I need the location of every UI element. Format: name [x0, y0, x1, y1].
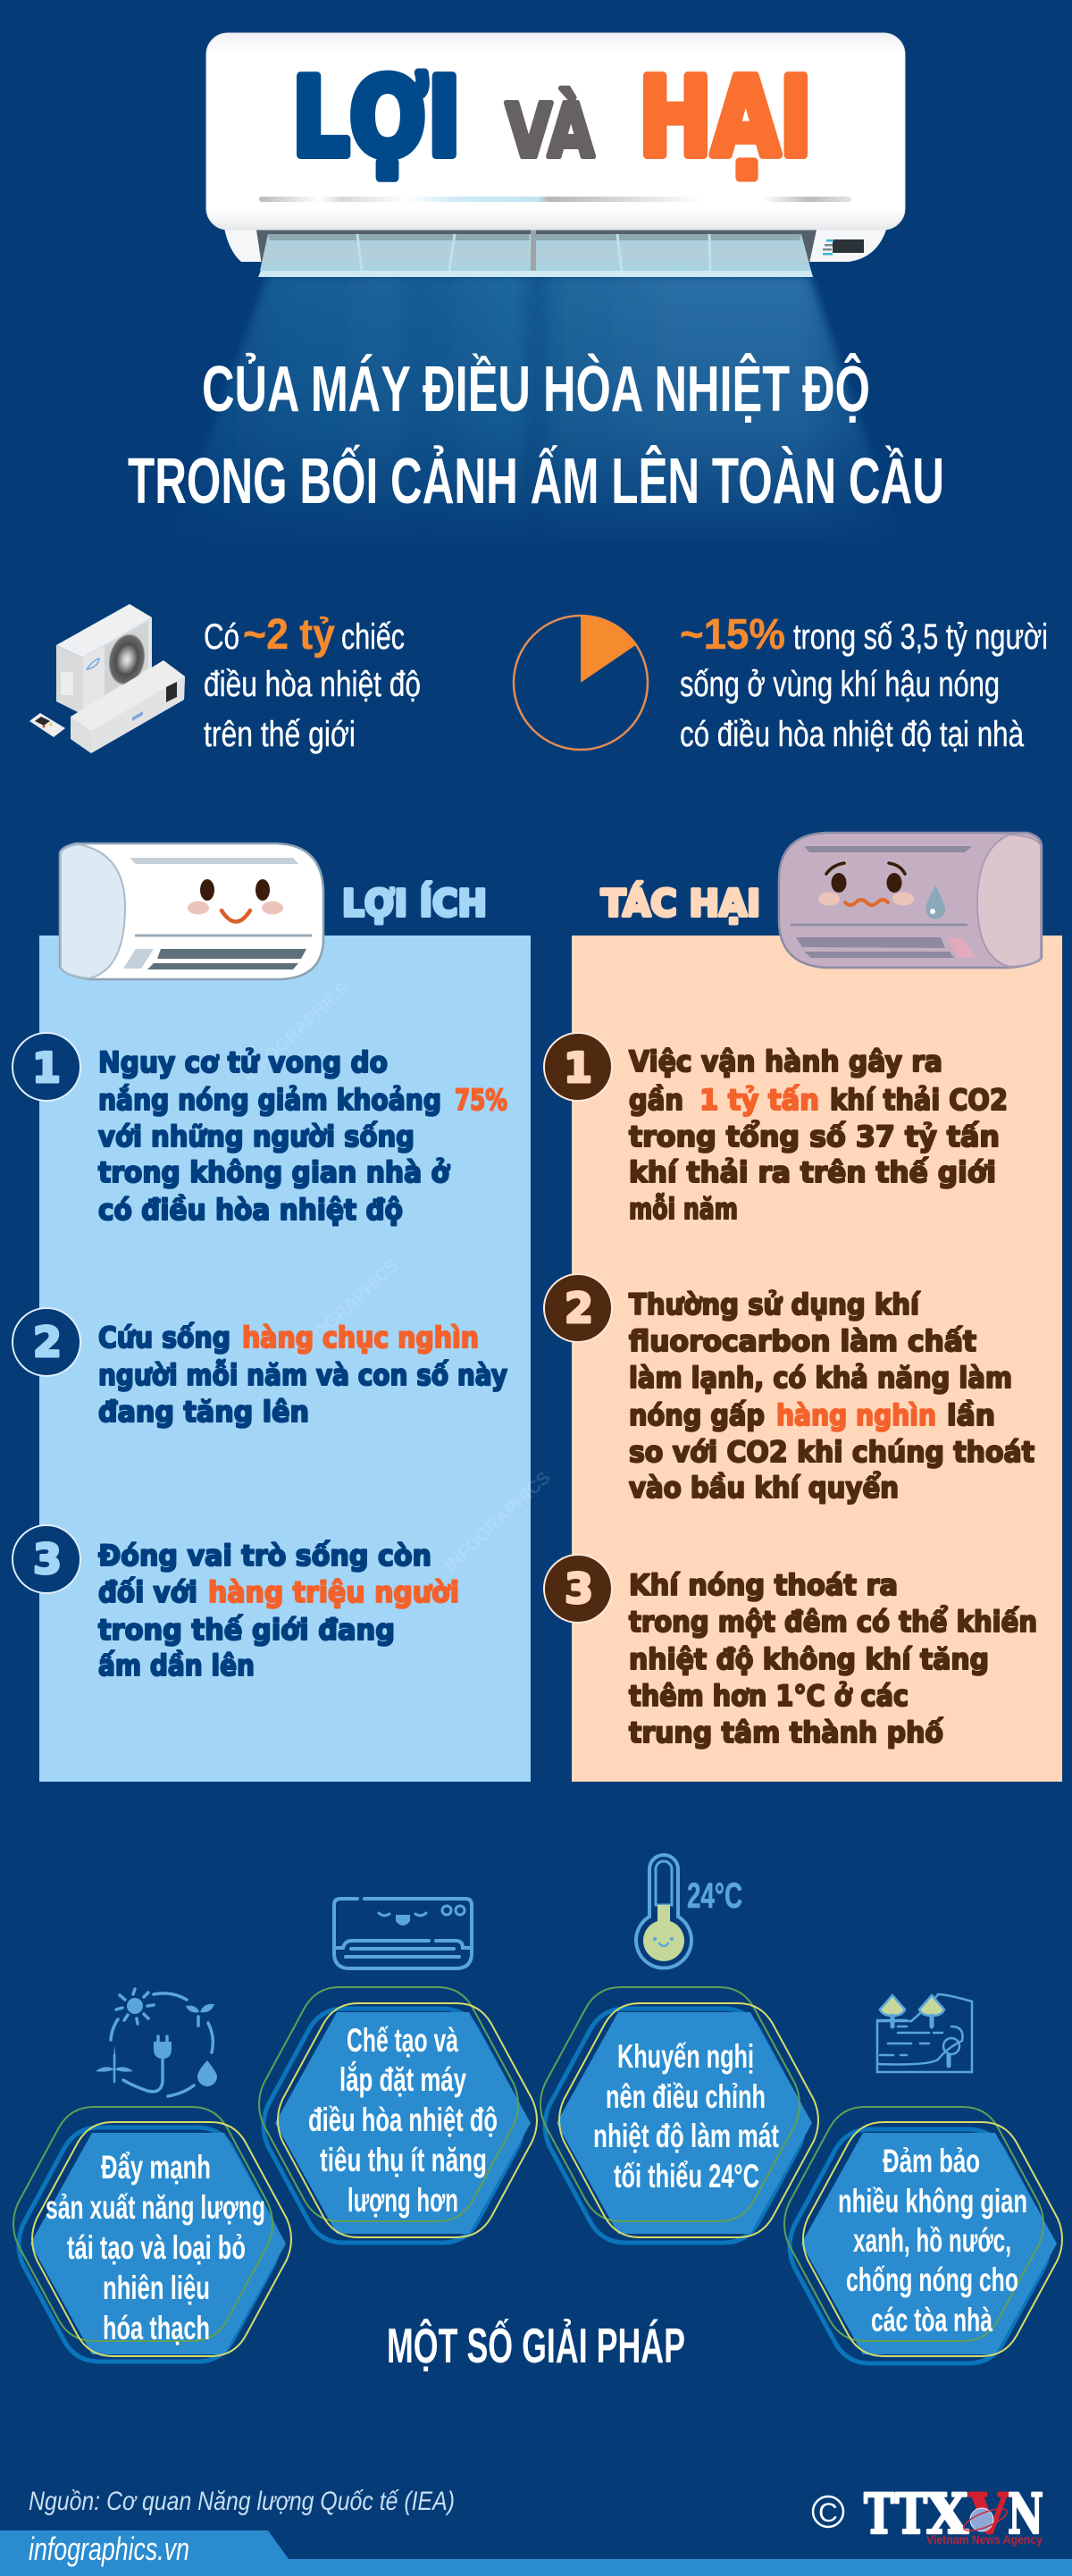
solution 2 text: [308, 2022, 498, 2219]
number badge 2: 2: [565, 1284, 593, 1332]
harm 2: làm lạnh, có khả năng làm: [629, 1361, 1012, 1395]
AC front body: [206, 33, 905, 230]
number badge 1: [544, 1033, 612, 1101]
number badge 2: 2: [33, 1318, 62, 1366]
harm 2: hàng nghìn: [776, 1398, 936, 1432]
agency name: Vietnam News Agency: [926, 2532, 1043, 2547]
logo: TTXVN copyright: [813, 2481, 1043, 2547]
solution 1 hexagon: [13, 2107, 291, 2362]
wordmark: N: [1008, 2481, 1043, 2547]
solution 3 hexagon: [540, 1987, 818, 2243]
heading: TÁC HẠI: TÁC HẠI: [601, 882, 760, 925]
solution 1 text: tái tạo và loại bỏ: [67, 2229, 246, 2266]
harm 3: thêm hơn 1°C ở các: [629, 1679, 909, 1713]
panel background: [572, 936, 1062, 1782]
benefit 1: nắng nóng giảm khoảng: [98, 1083, 441, 1117]
heading: solutions: MỘT SỐ GIẢI PHÁP: [387, 2318, 685, 2373]
solution 2 text: Chế tạo và: [347, 2022, 458, 2059]
harm 1: khí thải ra trên thế giới: [629, 1155, 996, 1189]
solution 2 text: tiêu thụ ít năng: [320, 2142, 487, 2178]
title: LỢI: LỢI: [292, 56, 461, 180]
number badge 3: [13, 1525, 80, 1593]
title: HẠI: HẠI: [639, 56, 812, 180]
benefit 3: ấm dần lên: [98, 1649, 255, 1682]
number badge 2: [13, 1308, 80, 1376]
harm 3: trung tâm thành phố: [629, 1716, 943, 1749]
benefit 1: với những người sống: [98, 1120, 415, 1154]
benefit 1: trong không gian nhà ở: [98, 1155, 450, 1189]
watermarks on benefits panel: INFOGRAPHICS: [289, 1255, 403, 1364]
number badge 1: 1: [32, 1044, 61, 1092]
solution 4 text: Đảm bảo: [883, 2143, 980, 2179]
solution 3 text: tối thiểu 24°C: [614, 2158, 759, 2194]
wordmark: [864, 2481, 1043, 2547]
harm 2: vào bầu khí quyển: [629, 1471, 899, 1505]
AC lower casing: [223, 223, 888, 262]
AC indicator stripe: [259, 197, 851, 202]
number badge 1: [13, 1033, 80, 1101]
footer bar with site name: [0, 2530, 1072, 2576]
benefit 3: hàng triệu người: [208, 1575, 459, 1609]
panel: benefits: [13, 843, 555, 1782]
solution 4 hexagon: [784, 2107, 1062, 2363]
source note: Nguồn: Cơ quan Năng lượng Quốc tế (IEA): [29, 2487, 455, 2516]
icon: air conditioner outline: [334, 1899, 472, 1968]
number badge 2: [544, 1274, 612, 1342]
wordmark: T: [864, 2481, 894, 2547]
stat: 15% of 3.5 billion: [680, 611, 1048, 754]
solution 1 text: Đẩy mạnh: [101, 2149, 211, 2186]
stat: 2 billion units: chiếc: [341, 617, 405, 657]
panel: harms: [544, 833, 1062, 1782]
outdoor unit: [56, 604, 152, 715]
watermarks on benefits panel: INFOGRAPHICS: [440, 1468, 555, 1576]
number badge 3: 3: [33, 1535, 62, 1583]
watermarks on benefits panel: [239, 978, 555, 1576]
pie chart: 15%: [514, 616, 648, 750]
benefit 3: trong thế giới đang: [98, 1613, 395, 1647]
solution 3 text: [593, 2038, 779, 2194]
benefit 1: Nguy cơ tử vong do: [98, 1045, 388, 1079]
wordmark: X: [926, 2481, 969, 2547]
benefit 1: [13, 1033, 507, 1227]
mascot: happy air conditioner: [60, 843, 323, 979]
harm 3: nhiệt độ không khí tăng: [629, 1642, 989, 1676]
solution 1 text: nhiên liệu: [103, 2270, 210, 2306]
number badge 1: 1: [564, 1044, 592, 1092]
stat: 2 billion units: [204, 611, 421, 754]
benefit 3: Đóng vai trò sống còn: [98, 1539, 431, 1573]
stat: 2 billion units: Có: [204, 617, 239, 657]
cold air beams: [205, 277, 875, 520]
harm 1: mỗi năm: [629, 1192, 738, 1226]
heading: LỢI ÍCH: LỢI ÍCH: [342, 882, 487, 925]
benefit 2: Cứu sống: [98, 1321, 230, 1355]
benefit 1: 75%: [455, 1083, 507, 1117]
harm 1: khí thải CO2: [830, 1083, 1008, 1117]
benefit 2: hàng chục nghìn: [242, 1321, 479, 1355]
title: VÀ: VÀ: [506, 88, 594, 174]
solution 4 text: các tòa nhà: [871, 2302, 992, 2338]
harm 2: fluorocarbon làm chất: [629, 1324, 976, 1358]
stat: 2 billion units: ~2 tỷ: [243, 611, 335, 659]
solution 1 text: hóa thạch: [103, 2310, 210, 2346]
harm 1: Việc vận hành gây ra: [629, 1045, 942, 1078]
indoor unit: [71, 660, 185, 753]
solution 3 text: Khuyến nghị: [617, 2038, 754, 2075]
copyright mark: C: [818, 2498, 838, 2528]
harm 3: Khí nóng thoát ra: [629, 1568, 898, 1602]
harm 2: Thường sử dụng khí: [629, 1288, 921, 1322]
watermarks on benefits panel: INFOGRAPHICS: [239, 978, 354, 1087]
icon: isometric air conditioners and remote: [29, 604, 185, 753]
harm 1: [544, 1033, 1008, 1226]
benefit 2: [13, 1308, 507, 1429]
harm 2: nóng gấp: [629, 1398, 765, 1432]
AC display: [823, 239, 864, 256]
stat: 15% of 3.5 billion: ~15%: [680, 611, 785, 659]
benefit 2: đang tăng lên: [98, 1395, 309, 1429]
AC louver: [258, 230, 813, 277]
stat: 2 billion units: điều hòa nhiệt độ: [204, 665, 421, 704]
harm 1: gần: [629, 1083, 683, 1117]
stat: 2 billion units: trên thế giới: [204, 715, 356, 754]
harm 1: trong tổng số 37 tỷ tấn: [629, 1120, 1000, 1154]
harm 1: 1 tỷ tấn: [699, 1083, 819, 1117]
site name: infographics.vn: [29, 2530, 189, 2567]
benefit 2: người mỗi năm và con số này: [98, 1358, 507, 1392]
copyright mark: [813, 2496, 843, 2528]
panel background: [39, 936, 531, 1782]
solution 3 text: nên điều chỉnh: [606, 2078, 766, 2115]
harm 3: [544, 1555, 1037, 1749]
solution 2 hexagon: [259, 1987, 537, 2243]
AC outlet slot: [256, 230, 817, 272]
solution 2 text: điều hòa nhiệt độ: [308, 2102, 498, 2138]
remote: [29, 713, 65, 737]
solution 1 text: [46, 2149, 265, 2346]
number badge 3: 3: [565, 1565, 593, 1613]
harm 2: [544, 1274, 1034, 1505]
harm 2: lần: [947, 1398, 995, 1432]
globe: [961, 2505, 1009, 2535]
number badge 3: [544, 1555, 612, 1623]
solution 2 text: lượng hơn: [348, 2182, 458, 2219]
benefit 3: [13, 1525, 459, 1682]
icon: renewable energy cycle: [96, 1989, 217, 2096]
air conditioner header with title: [206, 33, 905, 277]
wordmark: V: [968, 2481, 1009, 2547]
wordmark: T: [895, 2481, 927, 2547]
harm 2: so với CO2 khi chúng thoát: [629, 1435, 1034, 1469]
solution 4 text: [838, 2143, 1027, 2338]
harm 3: trong một đêm có thể khiến: [629, 1605, 1037, 1639]
heading: [128, 353, 944, 517]
solution 2 text: lắp đặt máy: [339, 2060, 466, 2098]
mascot: sad air conditioner: [779, 833, 1042, 968]
solution 1 text: sản xuất năng lượng: [46, 2189, 265, 2226]
solution 3 text: nhiệt độ làm mát: [593, 2118, 779, 2154]
icon: green park and lake: [877, 1994, 972, 2072]
benefit 1: có điều hòa nhiệt độ: [98, 1193, 403, 1227]
benefit 3: đối với: [98, 1575, 197, 1609]
icon: thermometer 24°C: [636, 1855, 742, 1968]
label 24°C: 24°C: [687, 1876, 742, 1916]
